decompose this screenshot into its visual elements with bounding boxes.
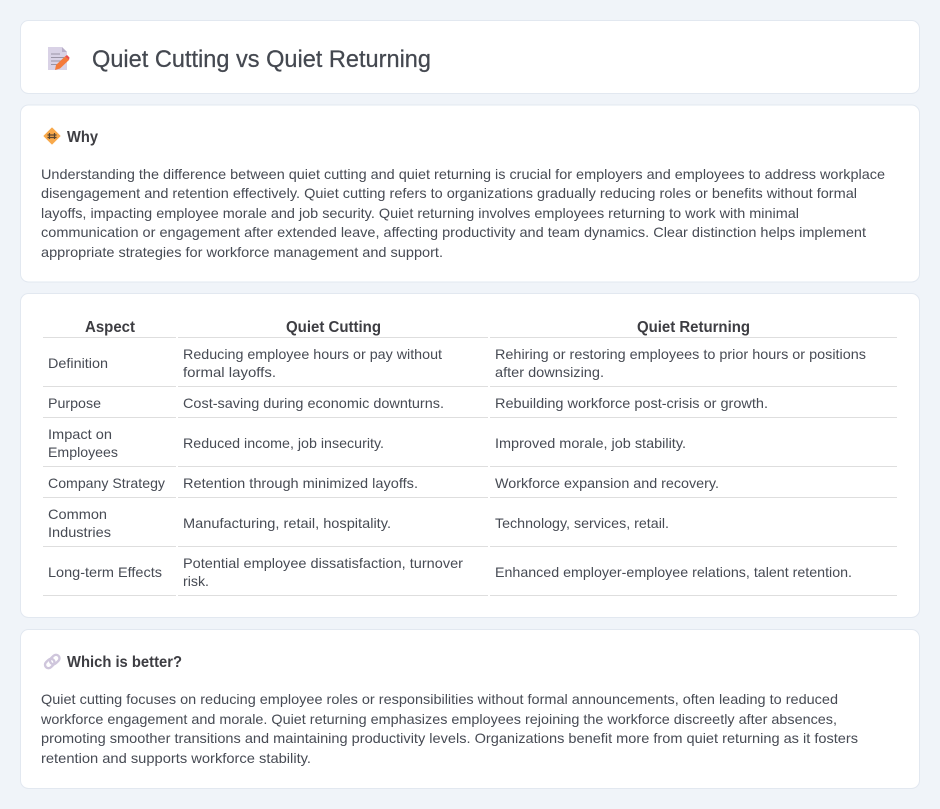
panel: why bbox=[20, 105, 920, 282]
row: definition: after downsizing. bbox=[495, 364, 604, 380]
row: impact on employees: Impact on bbox=[48, 426, 112, 442]
text block: why paragraph: disengagement and retention effectively. Quiet cutting refers to organizations gradually reducing roles or benefits without formal bbox=[41, 185, 857, 201]
icon: memo with pencil bbox=[48, 47, 70, 70]
heading: why: Why bbox=[67, 129, 98, 146]
row: long-term effects: risk. bbox=[183, 573, 209, 589]
row: definition: Definition bbox=[48, 355, 108, 371]
panel: which is better bbox=[20, 630, 920, 788]
row: common industries: Manufacturing, retail, hospitality. bbox=[183, 515, 391, 531]
text block: which is better paragraph: workforce engagement and morale. Quiet returning emphasizes employees rejoining the workforce discreetly after absences, bbox=[40, 711, 837, 727]
text block: which is better paragraph: retention and supports workforce stability. bbox=[41, 750, 311, 766]
panel: title header bbox=[20, 20, 920, 94]
row: purpose: Rebuilding workforce post-crisis or growth. bbox=[495, 395, 768, 411]
row: long-term effects bbox=[48, 555, 852, 589]
row: long-term effects: Potential employee dissatisfaction, turnover bbox=[183, 555, 463, 571]
row: company strategy bbox=[48, 475, 719, 491]
text block: why paragraph: Understanding the difference between quiet cutting and quiet returning is crucial for employers and employees to address workplace bbox=[41, 166, 885, 182]
text block: why paragraph: communication or engagement after extended leave, affecting productivity and team dynamics. Clear distinction helps implement bbox=[41, 224, 866, 240]
row: purpose bbox=[48, 395, 768, 411]
table header row: Aspect bbox=[85, 319, 136, 336]
panel: comparison table bbox=[20, 294, 920, 618]
text block: why paragraph: layoffs, impacting employee morale and job security. Quiet returning involves employees returning to work with minimal bbox=[41, 205, 799, 221]
row: definition bbox=[48, 346, 866, 380]
row: impact on employees: Reduced income, job insecurity. bbox=[183, 435, 384, 451]
row: impact on employees: Employees bbox=[48, 444, 118, 460]
row: impact on employees bbox=[48, 426, 686, 460]
row: common industries: Technology, services, retail. bbox=[495, 515, 669, 531]
row: long-term effects: Long-term Effects bbox=[48, 564, 162, 580]
text block: why paragraph bbox=[41, 166, 885, 260]
table header row: Quiet Returning bbox=[637, 319, 750, 336]
row: common industries: Industries bbox=[48, 524, 111, 540]
icon: orange diamond sign bbox=[44, 128, 60, 144]
heading: which is better: Which is better? bbox=[67, 654, 182, 671]
icon: chain link bbox=[44, 653, 61, 670]
row: definition: Reducing employee hours or pay without bbox=[183, 346, 442, 362]
row: purpose: Purpose bbox=[48, 395, 101, 411]
row: company strategy: Retention through minimized layoffs. bbox=[183, 475, 418, 491]
text block: which is better paragraph: promoting smoother transitions and maintaining productivity levels. Organizations benefit more from quiet returning as it fosters bbox=[41, 730, 858, 746]
text block: which is better paragraph: Quiet cutting focuses on reducing employee roles or responsibilities without formal announcements, often leading to reduced bbox=[41, 691, 838, 707]
table header row bbox=[85, 319, 750, 336]
text block: why paragraph: appropriate strategies for workforce management and support. bbox=[41, 244, 443, 260]
row: company strategy: Workforce expansion and recovery. bbox=[495, 475, 719, 491]
row: purpose: Cost-saving during economic downturns. bbox=[183, 395, 444, 411]
row: common industries: Common bbox=[48, 506, 107, 522]
text block: which is better paragraph bbox=[40, 691, 858, 766]
table header row: Quiet Cutting bbox=[286, 319, 381, 336]
title: Quiet Cutting vs Quiet Returning bbox=[92, 46, 431, 73]
row: definition: formal layoffs. bbox=[183, 364, 276, 380]
row: definition: Rehiring or restoring employees to prior hours or positions bbox=[495, 346, 866, 362]
row: common industries bbox=[48, 506, 669, 540]
row: long-term effects: Enhanced employer-employee relations, talent retention. bbox=[495, 564, 852, 580]
row: impact on employees: Improved morale, job stability. bbox=[495, 435, 686, 451]
row: company strategy: Company Strategy bbox=[48, 475, 165, 491]
